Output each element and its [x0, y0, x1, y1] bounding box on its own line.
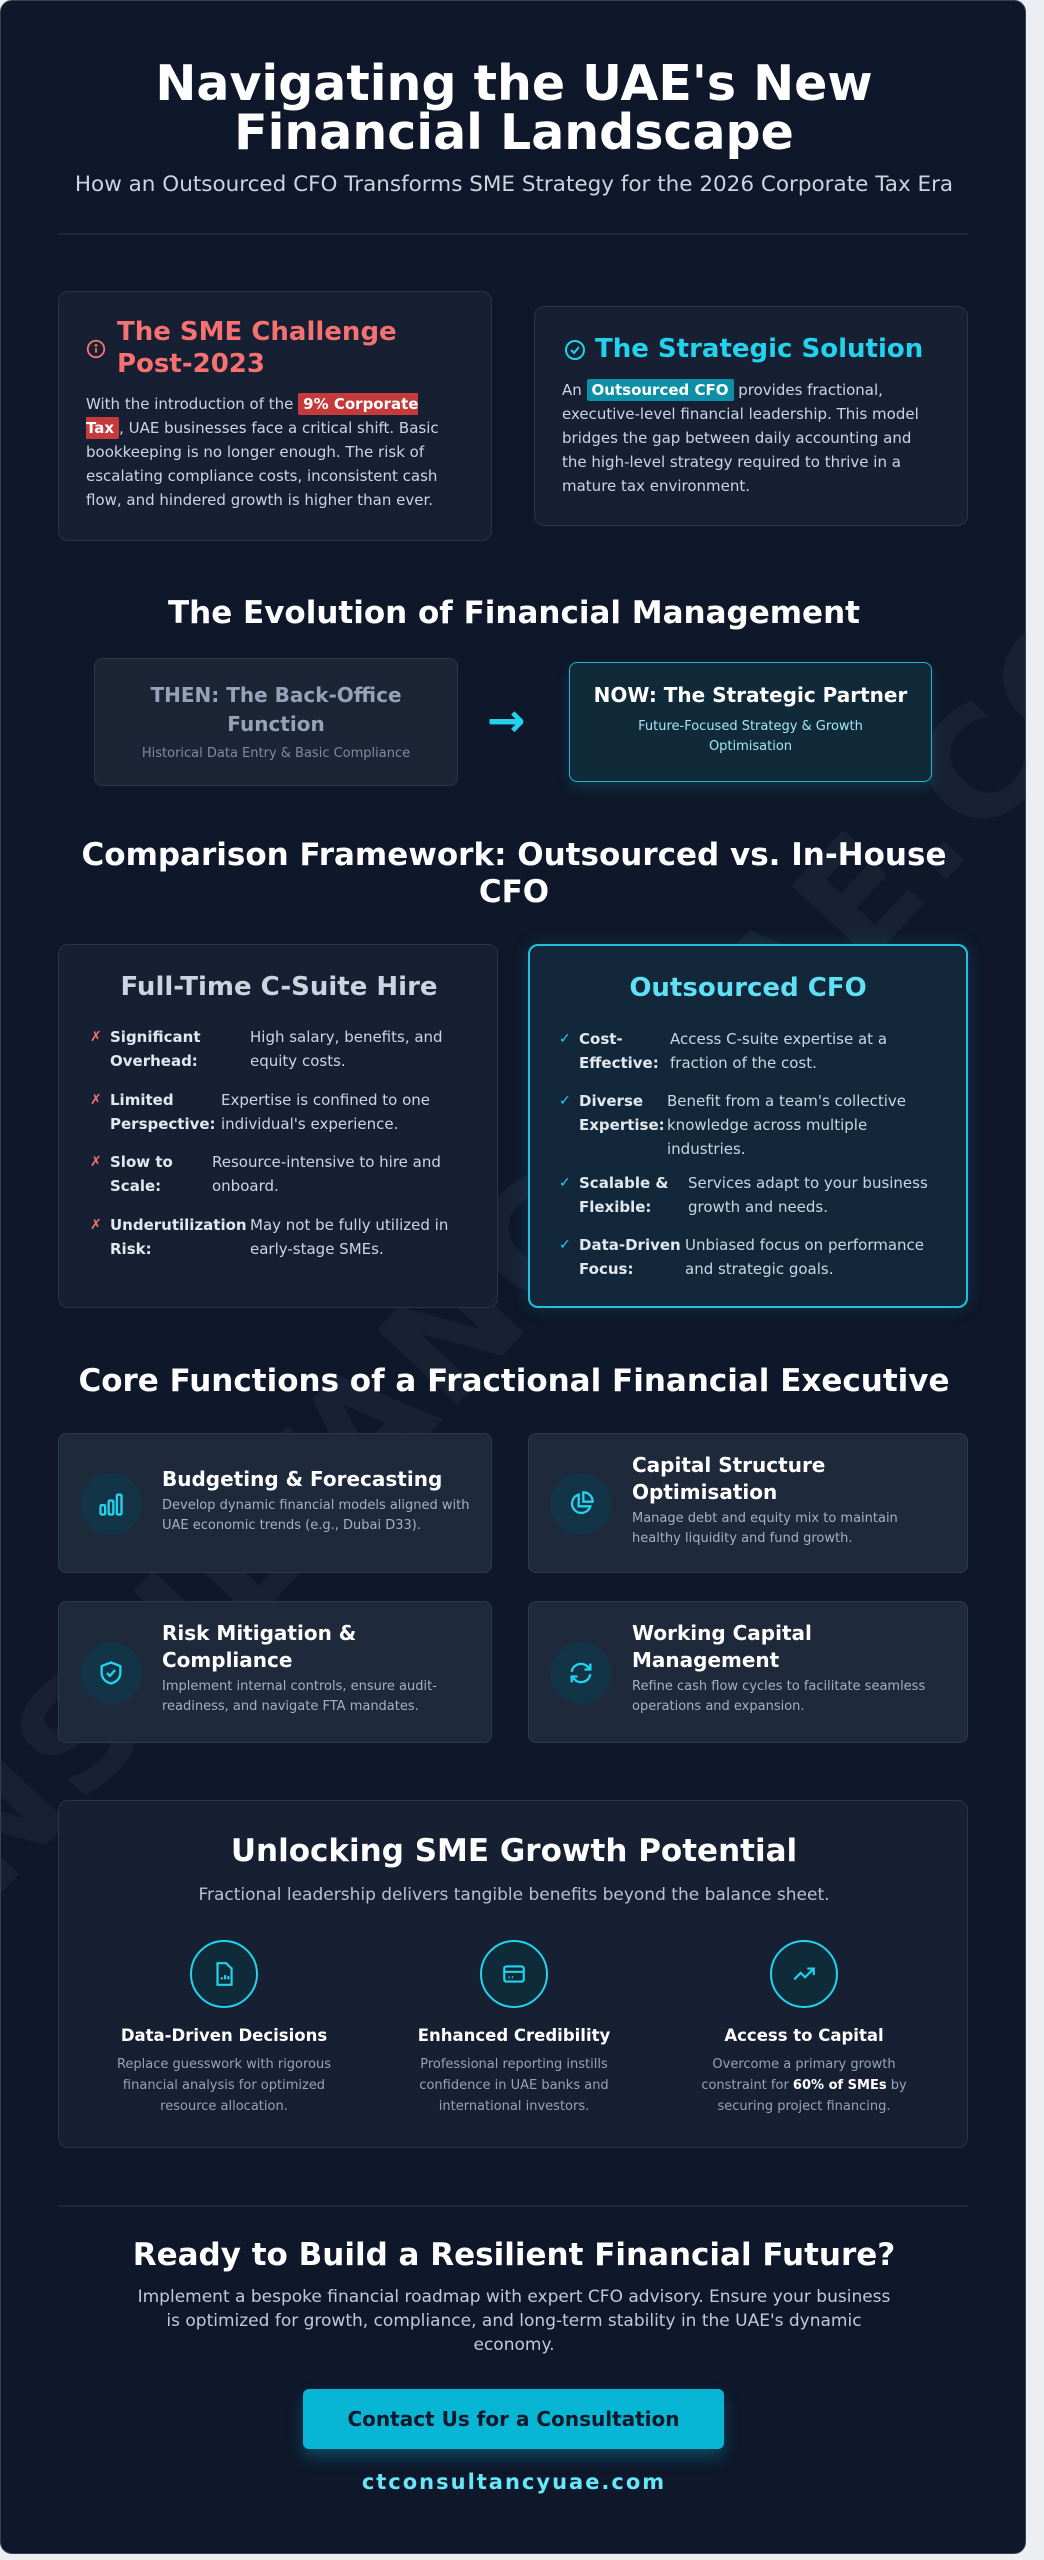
button: contact: [303, 2389, 724, 2449]
list: drawbacks: ✗: [90, 1217, 102, 1233]
heading: full-time: Full-Time C-Suite Hire: [120, 972, 438, 1002]
url: ctconsultancyuae.com: [362, 2470, 666, 2494]
benefit: credibility: Enhanced Credibility: [418, 2026, 610, 2045]
list: drawbacks: Risk:: [110, 1240, 152, 1258]
card: capital structure: [528, 1433, 968, 1573]
icon: bar chart: [80, 1473, 142, 1535]
card: risk: Implement internal controls, ensure audit-readiness, and navigate FTA mandates.: [162, 1679, 437, 1714]
box: NOW: Optimisation: [709, 739, 792, 754]
list: benefits: Cost-: [579, 1030, 623, 1048]
list: drawbacks: ✗: [90, 1154, 102, 1170]
card: budgeting: Develop dynamic financial models aligned with UAE economic trends (e.g., Dubai D33).: [162, 1498, 470, 1533]
icon: card: [480, 1940, 548, 2008]
heading: growth: Unlocking SME Growth Potential: [231, 1833, 797, 1869]
heading: outsourced: Outsourced CFO: [629, 973, 867, 1003]
icon: refresh: [550, 1642, 612, 1704]
icon: document chart: [190, 1940, 258, 2008]
list: benefits: [559, 1030, 928, 1278]
list: benefits: ✓: [559, 1237, 571, 1253]
heading: evolution: The Evolution of Financial Management: [168, 595, 860, 631]
panel: SME challenge: [58, 291, 492, 541]
heading: solution: The Strategic Solution: [595, 334, 923, 364]
list: benefits: ✓: [559, 1093, 571, 1109]
card: working capital: [528, 1601, 968, 1743]
text: CTA: Implement a bespoke financial roadmap with expert CFO advisory. Ensure your business is optimized for growth, compliance, and long-term stability in the UAE's dynamic economy.: [138, 2287, 890, 2355]
card: capital structure: Capital Structure: [632, 1453, 825, 1477]
list: benefits: Data-Driven: [579, 1236, 681, 1254]
heading: challenge: The SME Challenge: [117, 317, 397, 347]
subtitle: growth: Fractional leadership delivers tangible benefits beyond the balance sheet.: [198, 1885, 830, 1905]
panel: strategic solution: [534, 306, 968, 526]
list: drawbacks: Perspective:: [110, 1115, 216, 1133]
card: risk: Risk Mitigation &: [162, 1621, 356, 1645]
list: drawbacks: ✗: [90, 1029, 102, 1045]
box: THEN: [94, 658, 458, 786]
list: drawbacks: Overhead:: [110, 1052, 198, 1070]
list: benefits: Expertise:: [579, 1116, 665, 1134]
card: budgeting: Budgeting & Forecasting: [162, 1467, 442, 1491]
list: drawbacks: Limited: [110, 1091, 174, 1109]
list: drawbacks: [90, 1028, 448, 1258]
list: drawbacks: Scale:: [110, 1177, 161, 1195]
heading: CTA: Ready to Build a Resilient Financial Future?: [133, 2237, 895, 2273]
card: risk: Compliance: [162, 1648, 292, 1672]
list: drawbacks: High salary, benefits, and equity costs.: [250, 1028, 443, 1070]
list: benefits: Scalable &: [579, 1174, 668, 1192]
icon: trend: [770, 1940, 838, 2008]
panel: growth potential: Overcome a primary growth constraint for 60% of SMEs by securing project financing.: [701, 2057, 907, 2114]
text: solution: An Outsourced CFO provides fractional, executive-level financial leadership. This model bridges the gap between daily accounting and the high-level strategy required to thrive in a mature tax environment.: [562, 381, 919, 495]
list: drawbacks: Underutilization: [110, 1216, 247, 1234]
list: benefits: Focus:: [579, 1260, 633, 1278]
list: benefits: Diverse: [579, 1092, 643, 1110]
list: benefits: Unbiased focus on performance and strategic goals.: [685, 1236, 924, 1278]
box: NOW: Future-Focused Strategy & Growth: [638, 719, 863, 734]
panel: growth potential: [58, 1800, 968, 2148]
panel: growth potential: Professional reporting instills confidence in UAE banks and international investors.: [419, 2057, 609, 2114]
title: [155, 55, 873, 161]
list: drawbacks: Slow to: [110, 1153, 173, 1171]
box: THEN: THEN: The Back-Office: [150, 683, 402, 707]
list: drawbacks: Resource-intensive to hire and onboard.: [212, 1153, 441, 1195]
list: benefits: ✓: [559, 1031, 571, 1047]
heading: core functions: Core Functions of a Fractional Financial Executive: [78, 1363, 950, 1399]
subtitle: How an Outsourced CFO Transforms SME Strategy for the 2026 Corporate Tax Era: [75, 172, 953, 197]
icon: info: [86, 340, 106, 358]
panel: full-time hire: [58, 944, 498, 1308]
list: drawbacks: ✗: [90, 1092, 102, 1108]
box: THEN: Function: [227, 712, 325, 736]
list: benefits: Benefit from a team's collective knowledge across multiple industries.: [667, 1092, 906, 1158]
list: benefits: Services adapt to your business growth and needs.: [688, 1174, 928, 1216]
panel: growth potential: Replace guesswork with rigorous financial analysis for optimized resource allocation.: [117, 2057, 331, 2114]
card: capital structure: Optimisation: [632, 1480, 777, 1504]
heading: challenge: [117, 317, 397, 379]
box: THEN: Historical Data Entry & Basic Compliance: [142, 746, 410, 761]
button: contact: Contact Us for a Consultation: [347, 2407, 680, 2431]
title: Financial Landscape: [234, 104, 794, 161]
title: Navigating the UAE's New: [155, 55, 873, 112]
icon: pie chart: [550, 1473, 612, 1535]
list: benefits: Flexible:: [579, 1198, 651, 1216]
card: working capital: Refine cash flow cycles to facilitate seamless operations and expansion.: [632, 1679, 925, 1714]
card: risk: [58, 1601, 492, 1743]
list: drawbacks: Significant: [110, 1028, 200, 1046]
box: NOW: NOW: The Strategic Partner: [594, 683, 907, 707]
list: benefits: ✓: [559, 1175, 571, 1191]
icon: check circle: [565, 340, 585, 360]
text: challenge: With the introduction of the 9% Corporate Tax , UAE businesses face a critical shift. Basic bookkeeping is no longer enough. The risk of escalating compliance costs, inconsistent cash flow, and hindered growth is higher than ever.: [86, 395, 439, 509]
card: working capital: Working Capital: [632, 1621, 812, 1645]
benefit: capital: Access to Capital: [724, 2026, 884, 2045]
list: benefits: Access C-suite expertise at a fraction of the cost.: [670, 1030, 887, 1072]
icon: shield: [80, 1642, 142, 1704]
list: drawbacks: May not be fully utilized in early-stage SMEs.: [250, 1216, 448, 1258]
card: working capital: Management: [632, 1648, 779, 1672]
card: budgeting: [58, 1433, 492, 1573]
panel: outsourced CFO: [528, 944, 968, 1308]
card: capital structure: Manage debt and equity mix to maintain healthy liquidity and fund growth.: [632, 1511, 898, 1546]
arrow: →: [487, 693, 526, 747]
heading: challenge: Post-2023: [117, 349, 265, 379]
list: drawbacks: Expertise is confined to one individual's experience.: [221, 1091, 430, 1133]
heading: comparison: Comparison Framework: Outsourced vs. In-House CFO: [82, 837, 946, 910]
benefit: data-driven: Data-Driven Decisions: [121, 2026, 327, 2045]
list: benefits: Effective:: [579, 1054, 659, 1072]
box: NOW: [569, 662, 932, 782]
